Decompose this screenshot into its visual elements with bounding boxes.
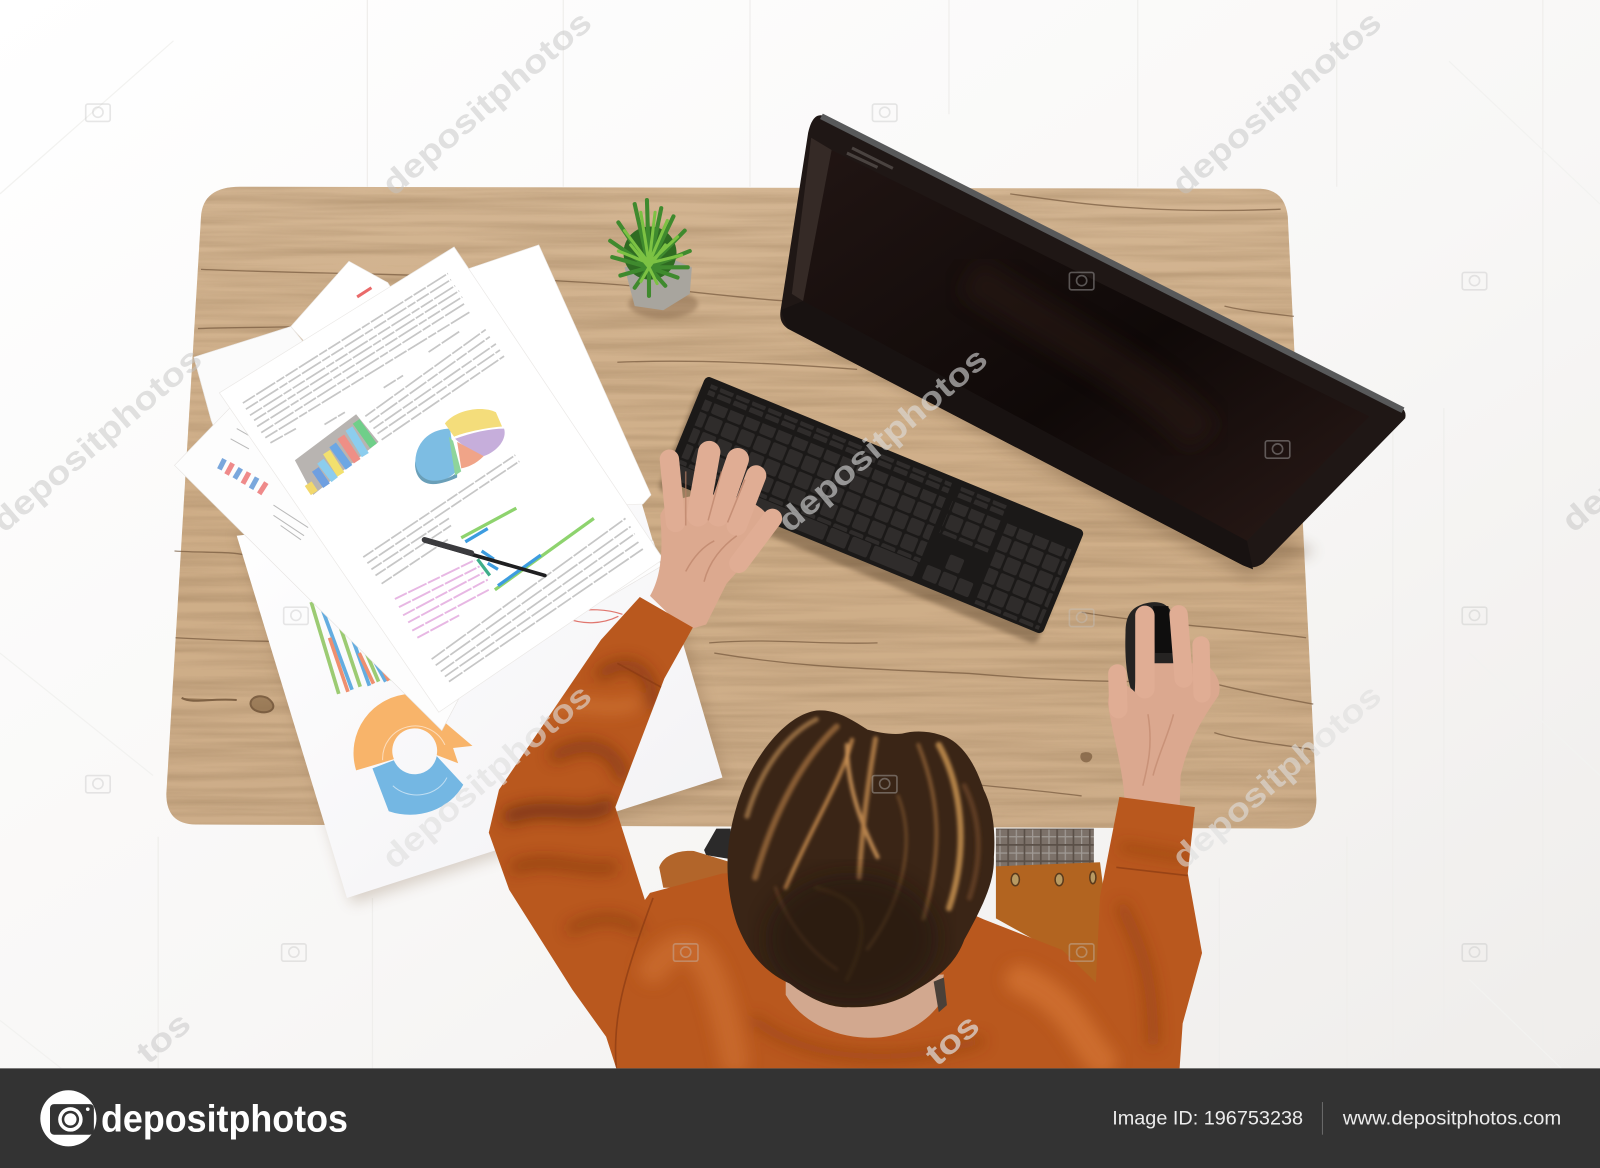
left hand (650, 452, 772, 631)
watermarks: depositphotos (1164, 676, 1388, 876)
main key block (679, 399, 946, 562)
palm and wrist (1108, 663, 1220, 809)
hair (728, 710, 994, 1008)
striped bar chart (311, 602, 392, 694)
right hand (1108, 614, 1220, 809)
watermarks: depositphotos (770, 340, 994, 539)
watermarks: depositphotos (1164, 3, 1388, 202)
logo wordmark: depositphotos (101, 1098, 348, 1140)
website url: www.depositphotos.com (1342, 1107, 1561, 1129)
hand creases (1143, 714, 1173, 786)
knuckle and finger creases (686, 471, 745, 582)
dark item under desk (704, 829, 731, 859)
sheet with small bar chart (174, 408, 661, 731)
fabric folds (510, 663, 1188, 1068)
orange shirt and sleeves (489, 597, 1202, 1068)
paper stack (174, 245, 727, 904)
hair streaks (747, 719, 978, 980)
watermarks: tos (128, 1004, 197, 1071)
icon: camera logo (40, 1090, 96, 1146)
monitor bezel (780, 115, 1406, 567)
keyboard shadow (657, 386, 1079, 645)
arrow keys (922, 547, 981, 598)
fingers (669, 452, 772, 563)
plaid shirt (996, 829, 1094, 867)
pen (424, 540, 545, 576)
plant leaves (610, 200, 690, 296)
function key row (707, 384, 952, 493)
footer divider (1322, 1102, 1323, 1135)
palm and wrist (650, 495, 767, 631)
computer mouse (1125, 602, 1176, 699)
small striped chart (219, 459, 266, 494)
watermarks: depositphotos (374, 676, 598, 876)
concrete pot (624, 255, 692, 310)
bottom sheet with donut chart (237, 490, 722, 898)
fingers (1117, 614, 1202, 709)
small camera watermark icons (86, 104, 1487, 961)
footer bar (0, 1068, 1600, 1168)
main sheet (219, 247, 663, 712)
keyboard (664, 376, 1085, 635)
shirt collar stripe (934, 978, 947, 1012)
image id: Image ID: 196753238 (1112, 1107, 1303, 1129)
neck (786, 974, 944, 1038)
numeric keypad (974, 523, 1071, 630)
far left sheet (194, 327, 439, 531)
upper sheet with red title (291, 261, 510, 480)
donut chart blue segment (372, 756, 463, 815)
donut chart orange segment (354, 694, 472, 770)
paper stack shadow (237, 531, 727, 904)
navigation keys (939, 501, 1001, 553)
text block two (365, 330, 504, 440)
pink text block (395, 560, 489, 638)
computer monitor (780, 115, 1406, 569)
potted plant (610, 200, 698, 318)
text block four (432, 518, 643, 682)
upper right sheet (429, 245, 651, 510)
watermarks: depositphotos (374, 3, 598, 202)
3D pie chart (415, 409, 505, 484)
faint red line plot (567, 610, 622, 623)
monitor screen (803, 150, 1369, 541)
text block one (243, 273, 469, 443)
3D bar chart (295, 414, 379, 495)
space bar row (674, 465, 918, 577)
text block three (363, 455, 519, 584)
hair dark crown (765, 872, 939, 1005)
monitor top rim (821, 116, 1403, 410)
horizontal bar chart (461, 508, 594, 590)
plant shadow (629, 290, 698, 318)
watermarks: tos (917, 1006, 986, 1073)
keyboard body (664, 376, 1085, 635)
waistband buttons (1011, 871, 1096, 886)
wooden desk (166, 187, 1316, 829)
media keys (955, 486, 1008, 516)
rear shirt pieces (659, 851, 1106, 985)
monitor shadow (781, 322, 1316, 578)
